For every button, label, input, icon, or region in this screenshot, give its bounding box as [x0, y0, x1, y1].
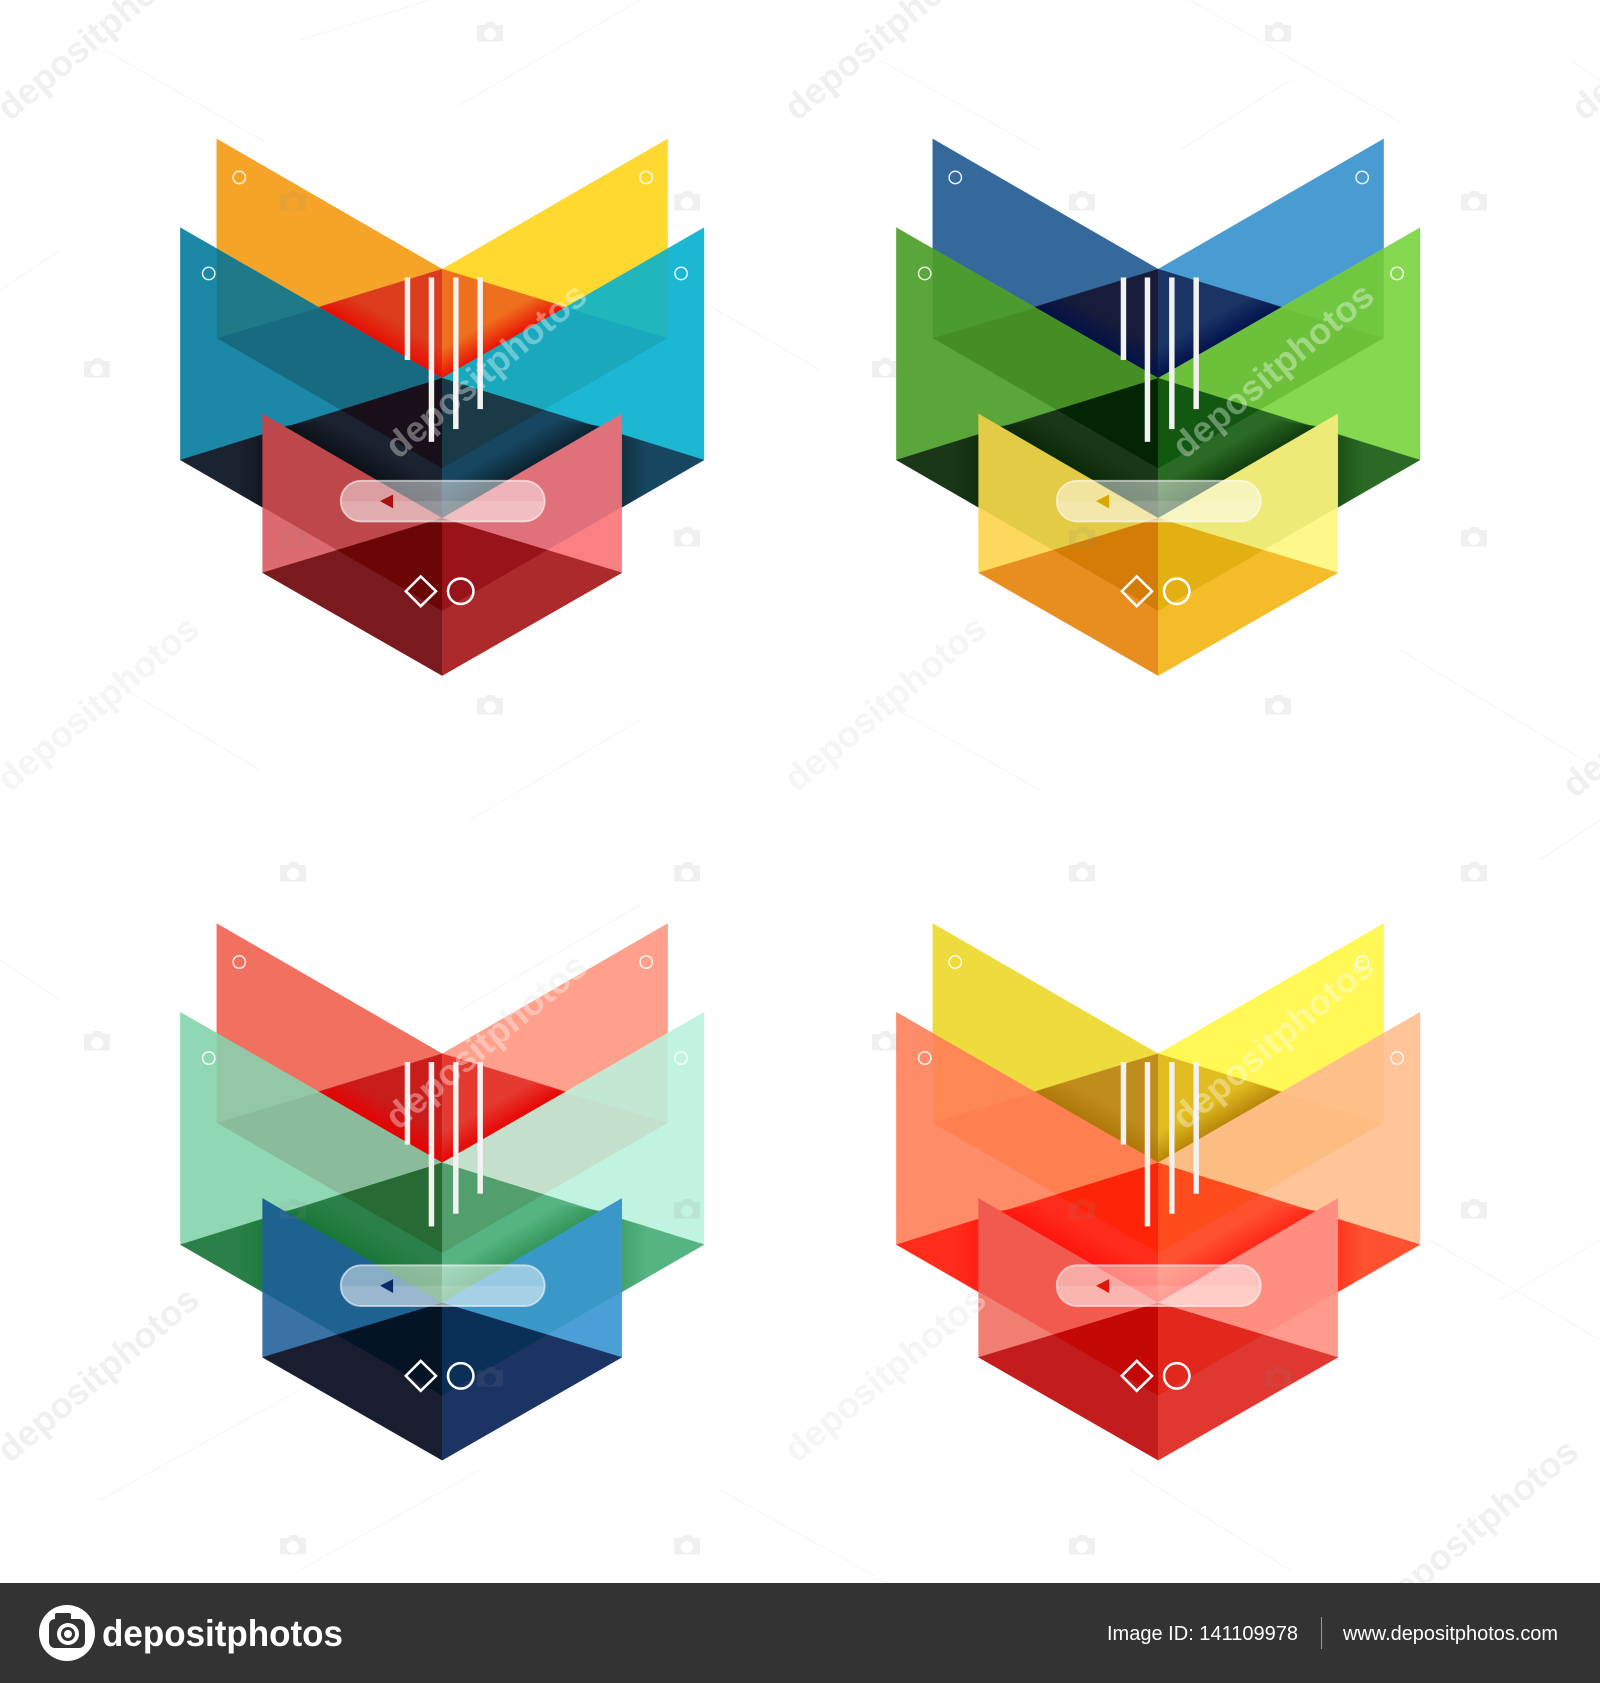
background: faint watermark layer: depositphotos — [1164, 945, 1382, 1137]
background: faint watermark layer: depositphotos — [776, 607, 994, 799]
watermark: translucent text over panels: depositphotos — [377, 945, 595, 1137]
icon: depositphotos camera logo — [39, 1605, 95, 1661]
watermark: translucent text over panels: depositphotos — [776, 1278, 994, 1470]
watermark: translucent text over panels: depositphotos — [1164, 945, 1382, 1137]
watermark: translucent text over panels: depositphotos — [776, 607, 994, 799]
watermark: translucent text over panels: depositphotos — [1164, 274, 1382, 466]
panel: coral mint blue chevron stack — [160, 905, 727, 1486]
image id: Image ID: 141109978 — [1107, 1623, 1298, 1645]
background: faint watermark layer: depositphotos — [1368, 1430, 1586, 1622]
watermark: translucent text over panels: depositphotos — [377, 274, 595, 466]
footer bar — [0, 1583, 1600, 1683]
panel: orange teal red chevron stack — [160, 120, 727, 702]
background: faint watermark layer: depositphotos — [776, 1278, 994, 1470]
background: faint watermark layer: depositphotos — [377, 945, 595, 1137]
panel: blue green yellow chevron stack — [876, 120, 1443, 702]
logo wordmark: depositphotos — [102, 1613, 343, 1654]
footer separator — [1321, 1617, 1322, 1649]
website url: www.depositphotos.com — [1342, 1623, 1558, 1645]
panel: yellow peach red chevron stack — [876, 905, 1443, 1486]
watermark: translucent text over panels — [0, 274, 1382, 1470]
watermark: faint camera icons — [84, 22, 1487, 1554]
